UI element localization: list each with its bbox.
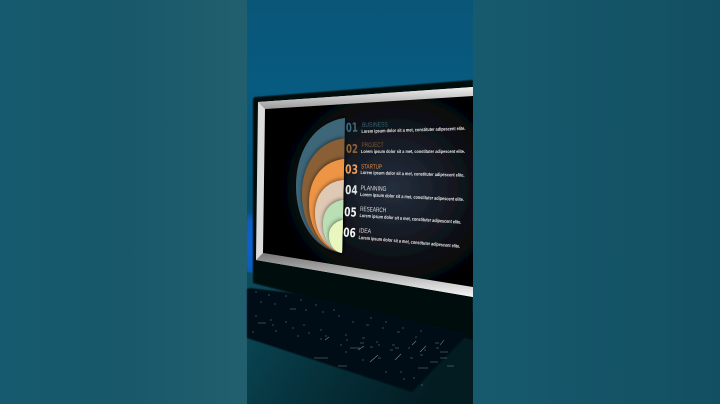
row 2: project: Lorem ipsum dolor sit a met, constituter adipescent elite. bbox=[361, 149, 465, 155]
ring 5 bbox=[323, 200, 343, 253]
laptop lid bbox=[253, 80, 473, 340]
center background bbox=[247, 0, 473, 404]
blue glow behind laptop bbox=[247, 211, 254, 273]
right side panel bbox=[473, 0, 720, 404]
row 3: startup: Lorem ipsum dolor sit a met, constituter adipescent elite. bbox=[360, 170, 465, 179]
row 1: business: BUSINESS bbox=[362, 122, 388, 129]
bezel bottom highlight bbox=[256, 253, 473, 297]
row 4: planning: PLANNING bbox=[360, 185, 387, 193]
row 5: research: RESEARCH bbox=[360, 206, 386, 214]
row 6: idea: 06 bbox=[343, 225, 357, 240]
row 3: startup bbox=[345, 162, 465, 179]
row 2: project bbox=[346, 141, 465, 156]
row 1: business: Lorem ipsum dolor sit a met, constituter adipescent elite. bbox=[361, 126, 466, 135]
row 3: startup: 03 bbox=[345, 162, 358, 177]
row 5: research: Lorem ipsum dolor sit a met, constituter adipescent elite. bbox=[359, 213, 462, 226]
ring 4 bbox=[315, 180, 344, 253]
laptop base bbox=[247, 272, 473, 404]
nested semicircle chart bbox=[296, 118, 345, 253]
row 2: project: 02 bbox=[346, 141, 358, 156]
row 4: planning: 04 bbox=[345, 182, 358, 197]
presentation slide bbox=[263, 96, 473, 287]
row 6: idea: IDEA bbox=[359, 228, 372, 235]
keyboard bbox=[247, 288, 468, 392]
row 3: startup: STARTUP bbox=[361, 164, 382, 171]
row 5: research bbox=[344, 204, 462, 226]
row 2: project: PROJECT bbox=[362, 142, 384, 149]
bezel top highlight bbox=[258, 87, 473, 109]
ring 2 bbox=[302, 138, 345, 253]
row 6: idea: Lorem ipsum dolor sit a met, constituter adipescent elite. bbox=[358, 235, 460, 250]
left side panel bbox=[0, 0, 247, 404]
ring 6 bbox=[329, 220, 343, 253]
row 1: business bbox=[346, 120, 466, 135]
row 4: planning bbox=[345, 182, 464, 203]
row 1: business: 01 bbox=[346, 120, 358, 135]
ring 1 bbox=[296, 118, 345, 253]
row 5: research: 05 bbox=[344, 204, 357, 220]
row 4: planning: Lorem ipsum dolor sit a met, constituter adipescent elite. bbox=[360, 192, 464, 203]
ring 3 bbox=[309, 159, 344, 253]
row 6: idea bbox=[343, 225, 460, 250]
screen bezel bbox=[256, 87, 473, 297]
